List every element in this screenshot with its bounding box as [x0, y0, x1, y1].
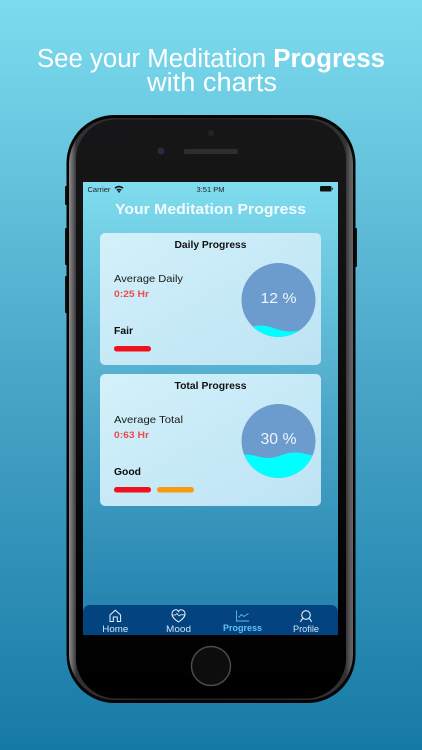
rating label: Fair	[114, 325, 133, 337]
tab: profile	[293, 611, 319, 634]
tab: mood: Mood	[166, 624, 191, 634]
tab: progress: Progress	[223, 623, 262, 633]
headline: See your Meditation Progress	[37, 45, 385, 73]
sensor	[208, 130, 214, 136]
tab: home	[102, 610, 128, 634]
tab: mood	[166, 610, 191, 634]
tab bar	[83, 605, 338, 635]
screen	[83, 182, 338, 635]
headline: with charts	[146, 69, 277, 97]
panel: total progress	[100, 374, 321, 506]
card heading: Total Progress	[174, 381, 247, 392]
rating bar	[114, 346, 151, 352]
average label: Average Total	[114, 414, 183, 426]
card heading: Daily Progress	[174, 240, 247, 251]
panel: daily progress	[100, 233, 321, 365]
status bar: Carrier	[88, 185, 111, 194]
status bar	[88, 185, 333, 194]
average value: 0:63 Hr	[114, 430, 149, 441]
home button	[192, 646, 230, 686]
status bar: 3:51 PM	[197, 185, 224, 194]
front camera	[158, 148, 164, 154]
headline	[37, 45, 385, 97]
gauge	[242, 404, 316, 478]
tab: home: Home	[102, 624, 128, 634]
average value: 0:25 Hr	[114, 289, 149, 300]
screen title: Your Meditation Progress	[115, 201, 306, 218]
average label: Average Daily	[114, 273, 184, 285]
tab: profile: Profile	[293, 624, 319, 634]
side buttons	[65, 186, 357, 313]
rating label: Good	[114, 466, 141, 478]
phone body	[66, 115, 356, 703]
gauge: 12 %	[260, 290, 296, 307]
tab: progress	[223, 610, 262, 633]
gauge: 30 %	[260, 431, 296, 448]
phone	[65, 115, 357, 703]
rating bars	[114, 487, 194, 492]
gauge	[242, 263, 316, 337]
speaker	[184, 149, 238, 154]
